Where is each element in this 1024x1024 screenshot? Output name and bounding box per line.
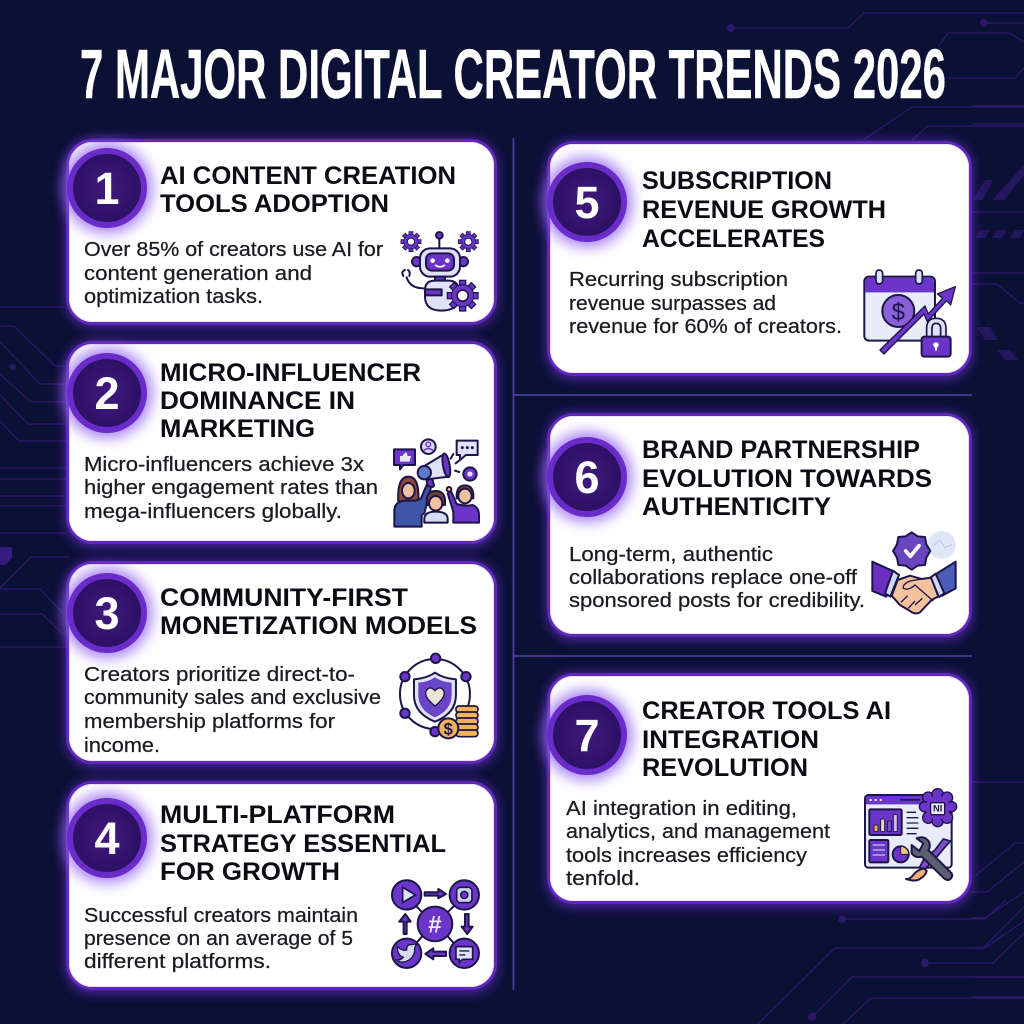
body text 6 (569, 543, 865, 612)
panel: trend 6 (542, 413, 972, 640)
heading 5: ACCELERATES (642, 225, 825, 253)
body text 5: revenue surpasses ad (569, 292, 776, 315)
body text 6: collaborations replace one-off (569, 566, 857, 589)
body text 6: sponsored posts for credibility. (569, 589, 865, 612)
number badge 1 (70, 151, 144, 225)
body text 2: higher engagement rates than (84, 476, 378, 499)
icon: crowd with megaphone (394, 439, 479, 527)
body text 5: Recurring subscription (569, 268, 788, 291)
body text 4 (84, 904, 358, 973)
number badge 5 (550, 165, 624, 239)
heading 2: MICRO-INFLUENCER (160, 359, 421, 387)
body text 3: Creators prioritize direct-to- (84, 663, 355, 686)
number badge 7 (550, 698, 624, 772)
heading 2 (160, 359, 421, 443)
heading 6 (642, 436, 932, 521)
heading 4: FOR GROWTH (160, 858, 340, 886)
body text 1: optimization tasks. (84, 285, 263, 308)
body text 7: tools increases efficiency (566, 844, 808, 867)
icon: handshake and verified badge (872, 531, 956, 613)
body text 3: community sales and exclusive (84, 686, 381, 709)
panel: trend 7 (542, 673, 972, 907)
body text 4: Successful creators maintain (84, 904, 358, 927)
icon: platform network (392, 880, 479, 968)
heading 5: SUBSCRIPTION (642, 167, 832, 195)
body text 3: income. (84, 734, 160, 757)
heading 2: DOMINANCE IN (160, 387, 355, 415)
heading 3: COMMUNITY-FIRST (160, 584, 408, 612)
body text 2: mega-influencers globally. (84, 500, 342, 523)
number badge 6 (550, 440, 624, 514)
icon: calendar, growth arrow and lock: $ (892, 299, 905, 326)
heading 5 (642, 167, 886, 253)
heading 4: MULTI-PLATFORM (160, 801, 395, 829)
panel: trend 3 (62, 561, 497, 767)
heading 5: REVENUE GROWTH (642, 196, 886, 224)
heading 6: EVOLUTION TOWARDS (642, 465, 932, 493)
body text 1 (84, 238, 383, 308)
number badge 6: 6 (574, 452, 600, 503)
number badge 3 (70, 576, 144, 650)
body text 7: analytics, and management (566, 820, 830, 843)
heading 7: REVOLUTION (642, 754, 808, 782)
number badge 3: 3 (94, 588, 120, 639)
body text 5: revenue for 60% of creators. (569, 315, 842, 338)
body text 1: Over 85% of creators use AI for (84, 238, 383, 261)
heading 1: AI CONTENT CREATION (160, 162, 456, 190)
icon: community shield and coins: $ (444, 719, 454, 738)
number badge 2: 2 (94, 368, 120, 419)
heading 1 (160, 162, 456, 218)
icon: platform network: # (428, 911, 442, 938)
icon: dashboard, AI brain and tools: NI (933, 804, 942, 814)
body text 5 (569, 268, 842, 338)
heading 7 (642, 697, 891, 782)
number badge 4: 4 (94, 813, 120, 864)
icon: calendar, growth arrow and lock (864, 270, 955, 357)
body text 1: content generation and (84, 262, 312, 285)
number badge 5: 5 (574, 177, 600, 228)
column and row dividers (513, 138, 972, 990)
icon: robot with gears (401, 232, 478, 311)
icon: dashboard, AI brain and tools (865, 789, 957, 881)
number badge 7: 7 (574, 710, 600, 761)
body text 3 (84, 663, 381, 757)
heading 3: MONETIZATION MODELS (160, 612, 477, 640)
heading 3 (160, 584, 477, 640)
body text 2: Micro-influencers achieve 3x (84, 453, 365, 476)
body text 2 (84, 453, 378, 523)
panel: trend 4 (62, 781, 497, 993)
heading 1: TOOLS ADOPTION (160, 190, 389, 218)
heading 2: MARKETING (160, 415, 315, 443)
number badge 4 (70, 801, 144, 875)
heading 4: STRATEGY ESSENTIAL (160, 830, 446, 858)
heading 7: INTEGRATION (642, 726, 819, 754)
body text 7 (566, 797, 830, 890)
body text 7: tenfold. (566, 867, 640, 890)
icon: community shield and coins (400, 654, 478, 738)
heading 4 (160, 801, 446, 886)
number badge 2 (70, 356, 144, 430)
number badge 1: 1 (94, 163, 120, 214)
panel: trend 5 (542, 141, 972, 379)
heading 6: AUTHENTICITY (642, 493, 831, 521)
body text 7: AI integration in editing, (566, 797, 797, 820)
heading 6: BRAND PARTNERSHIP (642, 436, 920, 464)
body text 3: membership platforms for (84, 710, 335, 733)
body text 6: Long-term, authentic (569, 543, 773, 566)
panel: trend 2 (62, 341, 497, 547)
body text 4: different platforms. (84, 950, 271, 973)
panel: trend 1 (62, 139, 497, 327)
heading 7: CREATOR TOOLS AI (642, 697, 891, 725)
body text 4: presence on an average of 5 (84, 927, 353, 950)
